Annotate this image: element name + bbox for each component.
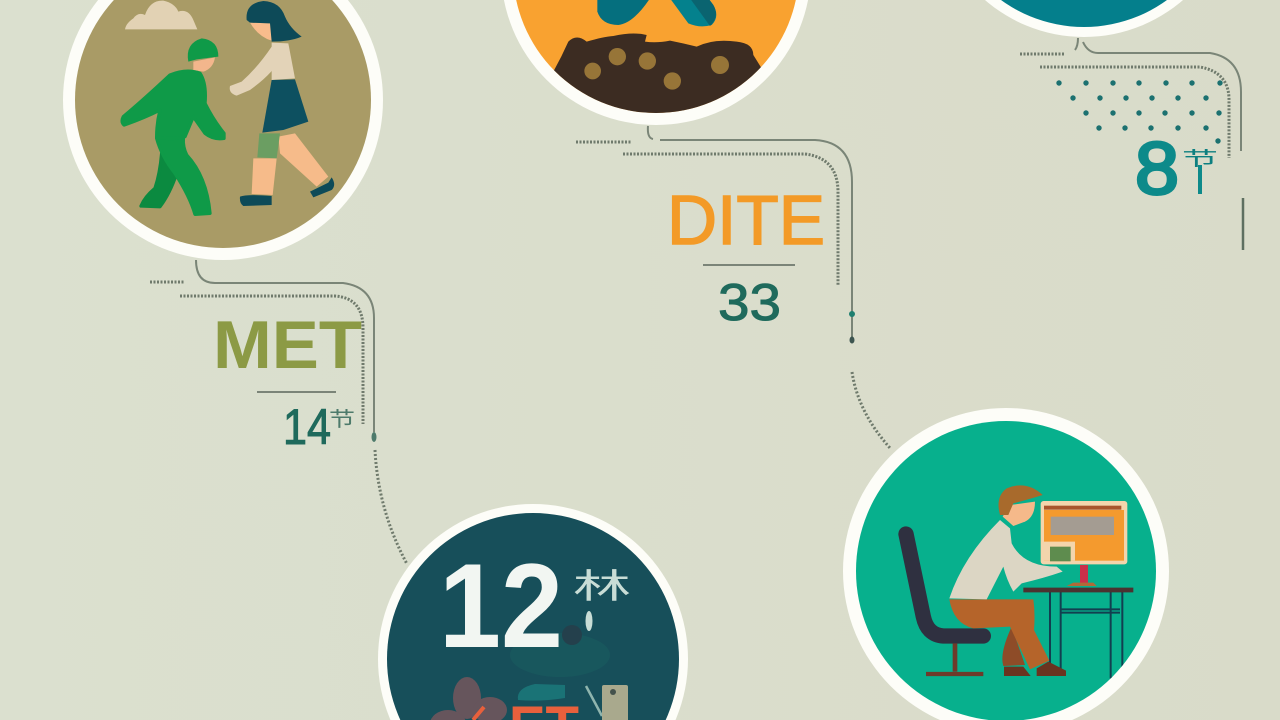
icon: faded teal smudge: [510, 633, 610, 677]
icon: teal leaves: [597, 0, 716, 26]
connector: second circle to DITE: [576, 126, 890, 448]
icon: drip: [586, 611, 592, 631]
icon: seated person: [949, 485, 1066, 676]
value: 8: 8: [1135, 127, 1179, 210]
icon: grey device: [586, 685, 628, 720]
connector: third circle to 8T: [1020, 38, 1243, 250]
panel: person at computer circle: [843, 408, 1169, 720]
icon: desk: [1023, 590, 1133, 678]
connector: first circle to MET: [150, 260, 407, 564]
icon: flower: [430, 677, 507, 720]
divider under MET: [257, 391, 336, 393]
panel: orange soil circle: [504, 0, 808, 125]
small glyph near 14: 节: [329, 408, 355, 431]
icon: computer monitor: [1041, 501, 1127, 586]
small glyph label: 林: [573, 568, 631, 606]
icon: man walking: [122, 38, 224, 214]
value: 33: 33: [718, 274, 781, 332]
icon: woman walking: [230, 1, 334, 206]
dot grid: [1056, 80, 1223, 144]
icon: soil with stones: [554, 34, 761, 113]
icon: dark dot: [562, 625, 582, 645]
icon: cloud: [125, 1, 197, 29]
panel: dark teal 12 circle: [378, 504, 688, 720]
heading: DITE: DITE: [667, 181, 825, 259]
panel: teal circle: [933, 0, 1235, 37]
divider under DITE: [703, 264, 795, 266]
small glyph above stem: 节: [1182, 148, 1218, 170]
value: 14: 14: [283, 399, 331, 455]
heading: MET: MET: [213, 307, 362, 383]
icon: chair: [906, 534, 983, 674]
value: 1 stem: [1198, 165, 1202, 194]
panel: walking figures circle: [63, 0, 383, 260]
icon: teal blob: [518, 684, 565, 701]
big number 12: 12: [439, 539, 563, 673]
